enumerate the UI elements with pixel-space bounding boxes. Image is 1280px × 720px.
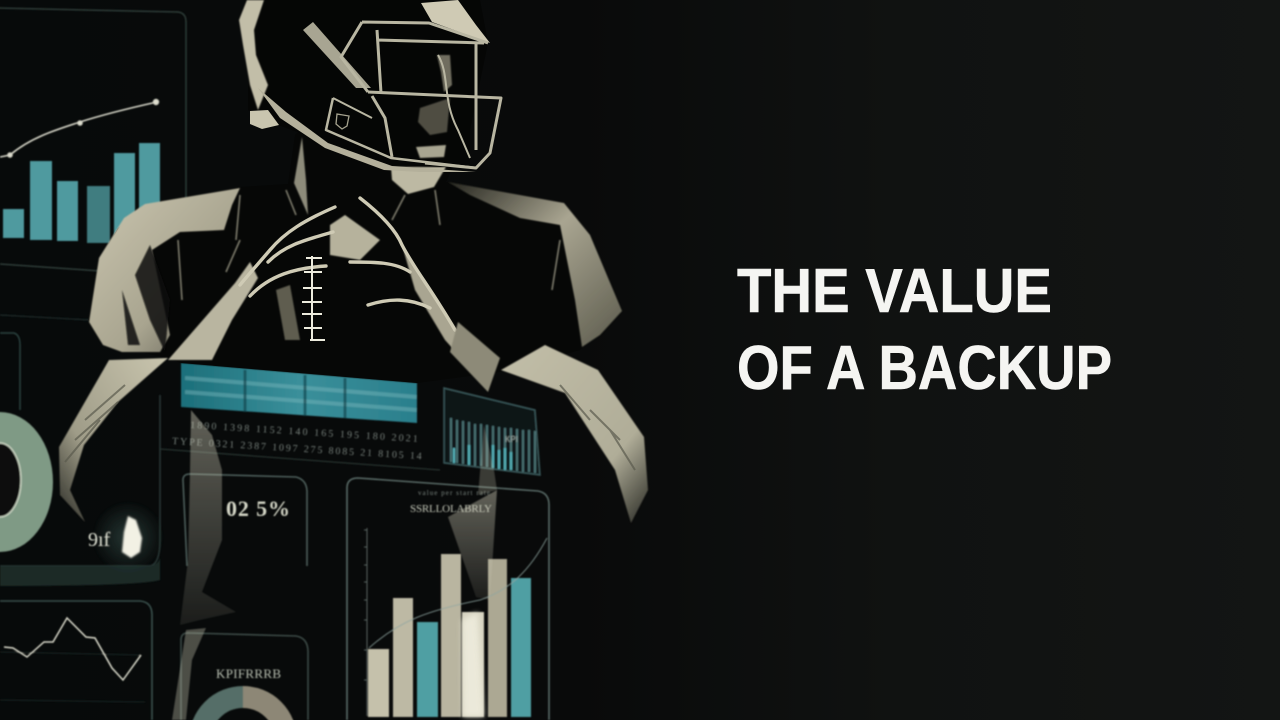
panel: small teal histogram xyxy=(444,388,540,475)
arm creases xyxy=(65,385,635,470)
card title: KPIFRRRB xyxy=(216,666,281,681)
panel: bottom-left line chart xyxy=(0,601,152,720)
chart title: SSRLLOLABRLY xyxy=(410,503,492,515)
line series xyxy=(4,618,141,680)
face mask xyxy=(326,22,501,168)
translucent jersey overlay right xyxy=(448,490,497,600)
table text: TYPE 0321 2387 1097 275 8085 21 8105 14 xyxy=(172,436,422,462)
right shoulder sleeve xyxy=(448,182,622,347)
left hand fingers xyxy=(240,207,335,296)
hands and football xyxy=(168,198,500,392)
donut ring xyxy=(0,412,53,552)
glowing label: 9ıf xyxy=(88,529,111,551)
helmet xyxy=(239,0,501,172)
right arm xyxy=(501,345,648,523)
table text: 1890 1398 1152 140 165 195 180 2021 xyxy=(190,420,418,445)
panel: small teal histogram: KPI xyxy=(505,435,518,444)
title: THE VALUE xyxy=(737,257,1052,326)
shirt folds xyxy=(178,190,560,300)
right forearm xyxy=(402,245,463,360)
side stripe xyxy=(303,22,371,88)
trend overlay xyxy=(369,538,547,648)
bars: top-left chart xyxy=(3,143,160,243)
ear pad xyxy=(250,110,279,129)
panel: lower KPI donut card xyxy=(181,633,308,720)
panel: percentage card xyxy=(183,474,307,566)
half donut xyxy=(200,697,286,720)
helmet logo xyxy=(336,114,349,129)
chin and neck highlight xyxy=(391,167,446,194)
face xyxy=(416,55,452,158)
left sleeve dark streaks xyxy=(122,245,170,352)
title xyxy=(737,257,1112,403)
percentage value: 02 5% xyxy=(226,496,290,521)
panel: left donut xyxy=(0,333,164,586)
panel: top-left trend chart xyxy=(0,8,186,320)
right hand fingers xyxy=(350,198,455,330)
player figure xyxy=(59,0,648,720)
panel: central teal table strip xyxy=(160,363,440,470)
left arm xyxy=(59,358,168,522)
table text xyxy=(172,420,422,462)
helmet shell xyxy=(248,0,488,168)
translucent jersey overlay lower left xyxy=(172,628,206,720)
chart title xyxy=(410,489,492,515)
dashboard panels behind player xyxy=(0,8,549,720)
glowing label xyxy=(88,501,164,573)
helmet rear edge xyxy=(239,0,268,110)
helmet front crown xyxy=(421,0,490,43)
title: OF A BACKUP xyxy=(737,334,1112,403)
football laces xyxy=(302,256,325,340)
wrist band xyxy=(450,322,500,392)
panel: main bar chart xyxy=(347,478,549,720)
translucent jersey overlay left xyxy=(180,410,236,625)
trend line xyxy=(0,100,158,157)
y axis xyxy=(364,528,367,716)
football highlight xyxy=(330,215,380,260)
chart title: value per start rate xyxy=(418,489,490,497)
left shoulder sleeve xyxy=(89,188,240,352)
torso silhouette xyxy=(88,60,621,383)
left forearm xyxy=(168,262,258,360)
helmet lower rim xyxy=(258,88,476,172)
neck xyxy=(294,137,308,215)
lower translucent bar highlight xyxy=(462,612,484,717)
bars xyxy=(368,554,531,717)
